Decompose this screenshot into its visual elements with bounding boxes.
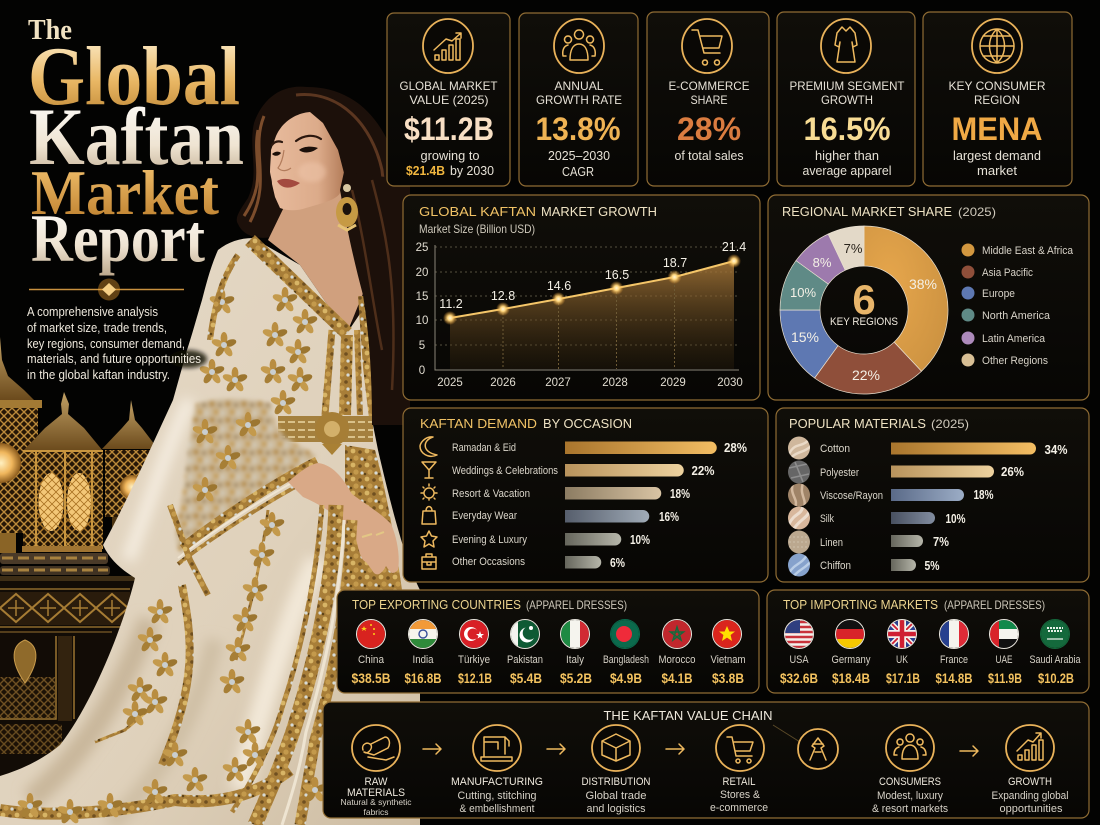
exporter values: $16.8B [404, 670, 442, 686]
importer values: $11.9B [988, 670, 1022, 686]
y axis labels: 5 [419, 340, 425, 352]
chain labels: Cutting, stitching [458, 790, 536, 802]
exporter names: Pakistan [507, 654, 543, 666]
exporter names: Türkiye [458, 654, 490, 666]
exporter values: $5.2B [560, 670, 592, 686]
exporter names: India [412, 654, 434, 666]
flag: Pakistan [510, 619, 540, 649]
kaftan dress body [0, 238, 420, 825]
icon: fabric roll [352, 725, 400, 771]
KPI: annual growth rate: CAGR [562, 165, 594, 179]
panel: top exporting countries [337, 590, 759, 693]
occasion bars [565, 442, 717, 568]
chain labels: & resort markets [872, 803, 948, 815]
panel: demand by occasion [403, 408, 768, 582]
exporter names: Bangladesh [603, 654, 649, 666]
panel: top importing markets [767, 590, 1089, 693]
material bars [891, 442, 1036, 571]
heading [420, 416, 632, 431]
chain labels: and logistics [586, 803, 646, 815]
material values [924, 443, 1068, 573]
material values: 26% [1001, 465, 1024, 479]
chain labels: Natural & synthetic [340, 797, 412, 807]
donut centre: KEY REGIONS [830, 316, 898, 328]
importer values: $18.4B [832, 670, 870, 686]
KPI: premium segment growth: PREMIUM SEGMENT [790, 79, 905, 93]
data labels [439, 240, 746, 311]
chain labels: Stores & [720, 789, 761, 801]
arrow [960, 746, 978, 756]
data labels: 16.5 [605, 268, 629, 282]
material values: 5% [924, 559, 940, 573]
data labels: 14.6 [547, 279, 571, 293]
importer names: Saudi Arabia [1030, 654, 1081, 666]
y axis labels: 15 [416, 291, 428, 303]
exporter names: Vietnam [710, 654, 746, 666]
exporter names: Morocco [658, 654, 696, 666]
title: Global [28, 30, 240, 123]
KPI: annual growth rate: 13.8% [536, 111, 620, 147]
vertical skirt embroidery [0, 505, 352, 825]
title: Report [31, 200, 205, 276]
rings [362, 532, 384, 537]
occasion labels: Ramadan & Eid [452, 442, 516, 454]
y axis labels [416, 242, 428, 377]
arrow [547, 744, 565, 754]
lanterns and table scene [0, 337, 158, 776]
dress folds [30, 400, 318, 825]
occasion values [610, 441, 747, 570]
material values: 18% [974, 488, 994, 502]
heading: (2025) [931, 417, 969, 431]
x axis labels [437, 377, 743, 389]
heading: KAFTAN DEMAND [420, 416, 537, 431]
material labels [820, 443, 883, 572]
flag: Saudi Arabia [1040, 619, 1070, 649]
material labels: Silk [820, 513, 834, 525]
arrow [423, 744, 441, 754]
KPI: key consumer region: largest demand [953, 149, 1041, 163]
hair over shoulder [340, 172, 410, 425]
flag: China [356, 619, 386, 649]
growth line [450, 261, 734, 318]
occasion labels: Resort & Vacation [452, 488, 530, 500]
chain labels: & embellishment [460, 803, 534, 815]
occasion icons [420, 437, 437, 569]
exporter values: $5.4B [510, 670, 542, 686]
exporter names [358, 654, 746, 666]
legend: Asia Pacific [982, 267, 1033, 279]
heading: THE KAFTAN VALUE CHAIN [604, 709, 772, 723]
KPI: premium segment growth: average apparel [802, 164, 892, 178]
KPI: e-commerce share: E-COMMERCE [668, 79, 750, 93]
importer names: UAE [996, 654, 1012, 666]
panel: value chain [323, 702, 1089, 818]
occasion values: 22% [692, 464, 714, 478]
material labels: Viscose/Rayon [820, 490, 883, 502]
title: Market [31, 157, 220, 228]
stacked fabric books [0, 553, 110, 575]
data labels: 21.4 [722, 240, 746, 254]
title divider ornament [29, 278, 184, 300]
flag: USA [784, 619, 814, 649]
KPI: global market value: GLOBAL MARKET [400, 79, 498, 93]
fabric swatches [787, 436, 811, 577]
donut labels: 7% [844, 241, 863, 256]
neckline embroidery [250, 240, 373, 418]
material values: 34% [1044, 443, 1068, 457]
KPI: key consumer region: MENA [952, 111, 1042, 147]
sleeve embroidery [170, 399, 320, 595]
KPI: premium segment growth: 16.5% [804, 111, 890, 147]
panel: market growth chart: Market Size (Billion USD) [419, 222, 535, 236]
KPI: key consumer region: market [977, 164, 1018, 178]
heading: TOP IMPORTING MARKETS [783, 597, 938, 612]
occasion values: 10% [630, 533, 650, 547]
panel: market growth chart [403, 195, 760, 400]
KPI: e-commerce share: 28% [677, 111, 741, 147]
description: A comprehensive analysis [27, 305, 158, 319]
chain labels: MANUFACTURING [451, 776, 543, 788]
facial features [272, 136, 326, 188]
heading: POPULAR MATERIALS [789, 416, 926, 431]
flag: Italy [560, 619, 590, 649]
donut centre [830, 276, 898, 328]
KPI: key consumer region [923, 12, 1072, 186]
KPI: annual growth rate: 2025–2030 [548, 149, 610, 163]
occasion labels [452, 442, 558, 568]
importer names: France [940, 654, 968, 666]
icon: cart [716, 725, 764, 771]
chain labels: Expanding global [992, 790, 1068, 802]
title: Kaftan [29, 91, 244, 182]
importer values: $17.1B [886, 670, 920, 686]
exporter values: $4.1B [662, 670, 692, 686]
occasion labels: Everyday Wear [452, 510, 517, 522]
importer names: USA [790, 654, 809, 666]
description [27, 305, 207, 382]
lantern: back [102, 400, 158, 530]
heading: (APPAREL DRESSES) [944, 598, 1045, 612]
belt [278, 412, 373, 455]
description: materials, and future opportunities [27, 352, 201, 366]
importer names [790, 654, 1081, 666]
data labels: 18.7 [663, 256, 687, 270]
chain labels: RETAIL [722, 776, 756, 788]
KPI: premium segment growth: GROWTH [821, 93, 873, 107]
icon: kaftan emblem [798, 729, 838, 769]
data points [443, 254, 741, 325]
occasion values: 16% [659, 510, 679, 524]
importer names: UK [896, 654, 909, 666]
KPI: global market value: $11.2B [404, 111, 494, 147]
chain labels [340, 776, 1068, 817]
exporter names: China [358, 654, 385, 666]
importer values [780, 670, 1074, 686]
carved table [0, 576, 136, 776]
donut labels: 8% [813, 255, 832, 270]
KPI: global market value: $21.4B [406, 164, 445, 178]
legend: Europe [982, 288, 1015, 300]
hair back [237, 87, 410, 425]
occasion values: 28% [724, 441, 747, 455]
importer values: $14.8B [936, 670, 972, 686]
description: in the global kaftan industry. [27, 368, 170, 382]
y axis labels: 0 [419, 365, 425, 377]
occasion labels: Weddings & Celebrations [452, 465, 558, 477]
icon: growth [1006, 725, 1054, 771]
occasion labels: Other Occasions [452, 556, 525, 568]
KPI: key consumer region: REGION [974, 93, 1020, 107]
icon: rising bar chart [423, 19, 473, 73]
occasion values: 18% [670, 487, 690, 501]
legend: North America [982, 310, 1051, 322]
y axis labels: 20 [416, 267, 428, 279]
heading: (APPAREL DRESSES) [526, 598, 627, 612]
x axis labels: 2025 [437, 377, 463, 389]
title: The [28, 15, 72, 46]
chain labels: Modest, luxury [877, 790, 943, 802]
flag: Vietnam [712, 619, 742, 649]
chain labels: MATERIALS [347, 787, 405, 799]
material values: 10% [946, 512, 966, 526]
KPI: premium segment growth: higher than [815, 149, 879, 163]
chain labels: DISTRIBUTION [582, 776, 651, 788]
icon: sewing machine [473, 725, 521, 771]
x axis labels: 2026 [490, 377, 516, 389]
data labels: 11.2 [439, 297, 463, 311]
KPI: global market value: growing to [420, 149, 480, 163]
woman in kaftan [0, 87, 420, 825]
exporter values: $3.8B [712, 670, 744, 686]
neck and chest skin [268, 190, 372, 333]
legend: Middle East & Africa [982, 245, 1074, 257]
donut labels: 15% [791, 329, 819, 345]
heading: BY OCCASION [543, 416, 632, 431]
lantern: far left [0, 337, 42, 553]
donut labels: 10% [790, 285, 816, 300]
y axis labels: 25 [416, 242, 428, 254]
data labels: 12.8 [491, 289, 515, 303]
importer values: $10.2B [1038, 670, 1074, 686]
y axis labels: 10 [416, 315, 428, 327]
heading: TOP EXPORTING COUNTRIES [352, 597, 521, 612]
face [270, 112, 344, 210]
heading: (2025) [958, 205, 996, 219]
description: of market size, trade trends, [27, 321, 167, 335]
x axis labels: 2027 [545, 377, 571, 389]
x axis labels: 2029 [660, 377, 686, 389]
chain labels: GROWTH [1008, 776, 1052, 788]
KPI: annual growth rate [519, 13, 638, 186]
donut chart [780, 226, 948, 394]
arrow [666, 744, 684, 754]
panel: regional market share [768, 195, 1089, 400]
x axis labels: 2028 [602, 377, 628, 389]
KPI: annual growth rate: ANNUAL [554, 79, 604, 93]
donut centre: 6 [852, 276, 876, 323]
flag: UAE [989, 619, 1019, 649]
exporter values [352, 670, 744, 686]
flag: Bangladesh [610, 619, 640, 649]
exporter values: $12.1B [458, 670, 492, 686]
flag: Germany [835, 619, 865, 649]
material labels: Cotton [820, 443, 850, 455]
heading: GLOBAL KAFTAN [419, 204, 536, 219]
occasion labels: Evening & Luxury [452, 534, 527, 546]
connector line [773, 725, 800, 742]
flag: France [939, 619, 969, 649]
KPI: global market value: by 2030 [450, 164, 494, 178]
flag: Morocco [662, 619, 692, 649]
chain labels: RAW [364, 776, 388, 788]
flag: UK [887, 619, 917, 649]
heading: REGIONAL MARKET SHARE [782, 204, 952, 219]
chain labels: e-commerce [710, 802, 768, 814]
KPI: global market value [387, 13, 510, 186]
flag: Turkiye [459, 619, 489, 649]
heading: MARKET GROWTH [541, 204, 657, 219]
chest floral embroidery [199, 255, 318, 416]
KPI: global market value: VALUE (2025) [410, 93, 489, 107]
donut labels: 38% [909, 276, 937, 292]
earring [336, 184, 358, 230]
KPI: key consumer region: KEY CONSUMER [948, 79, 1046, 93]
KPI: e-commerce share: SHARE [690, 93, 728, 107]
importer names: Germany [832, 654, 871, 666]
importer values: $32.6B [780, 670, 818, 686]
KPI: e-commerce share [647, 12, 769, 186]
lantern: centre [22, 392, 103, 552]
icon: consumers [886, 725, 934, 771]
flag: India [408, 619, 438, 649]
arm and hand [288, 463, 399, 574]
exporter names: Italy [566, 654, 584, 666]
material labels: Chiffon [820, 560, 851, 572]
legend: Latin America [982, 333, 1046, 345]
chain labels: CONSUMERS [879, 776, 941, 788]
KPI: premium segment growth [777, 12, 915, 186]
heading [783, 597, 1045, 612]
icon: shopping cart [682, 19, 732, 73]
chain labels: fabrics [364, 807, 388, 817]
heading [419, 204, 657, 219]
exporter values: $38.5B [352, 670, 390, 686]
donut labels: 22% [852, 367, 880, 383]
chain labels: Global trade [586, 790, 646, 802]
description: key regions, consumer demand, [27, 337, 185, 351]
under-arm embroidery [345, 445, 402, 590]
donut labels [790, 241, 937, 383]
material values: 7% [933, 535, 949, 549]
KPI: annual growth rate: GROWTH RATE [536, 93, 622, 107]
icon: globe [972, 19, 1022, 73]
material labels: Polyester [820, 467, 859, 479]
icon: people group [554, 19, 604, 73]
legend: Other Regions [982, 355, 1048, 367]
title [28, 15, 244, 276]
icon: box [592, 725, 640, 771]
panel: popular materials [776, 408, 1089, 582]
occasion values: 6% [610, 556, 625, 570]
material labels: Linen [820, 537, 843, 549]
icon: kaftan dress [821, 19, 871, 73]
KPI: e-commerce share: of total sales [674, 149, 744, 163]
area under line [450, 261, 734, 369]
x axis labels: 2030 [717, 377, 743, 389]
heading [352, 597, 627, 612]
exporter values: $4.9B [610, 670, 642, 686]
legend [962, 244, 1074, 367]
chain labels: opportunities [1000, 803, 1063, 815]
